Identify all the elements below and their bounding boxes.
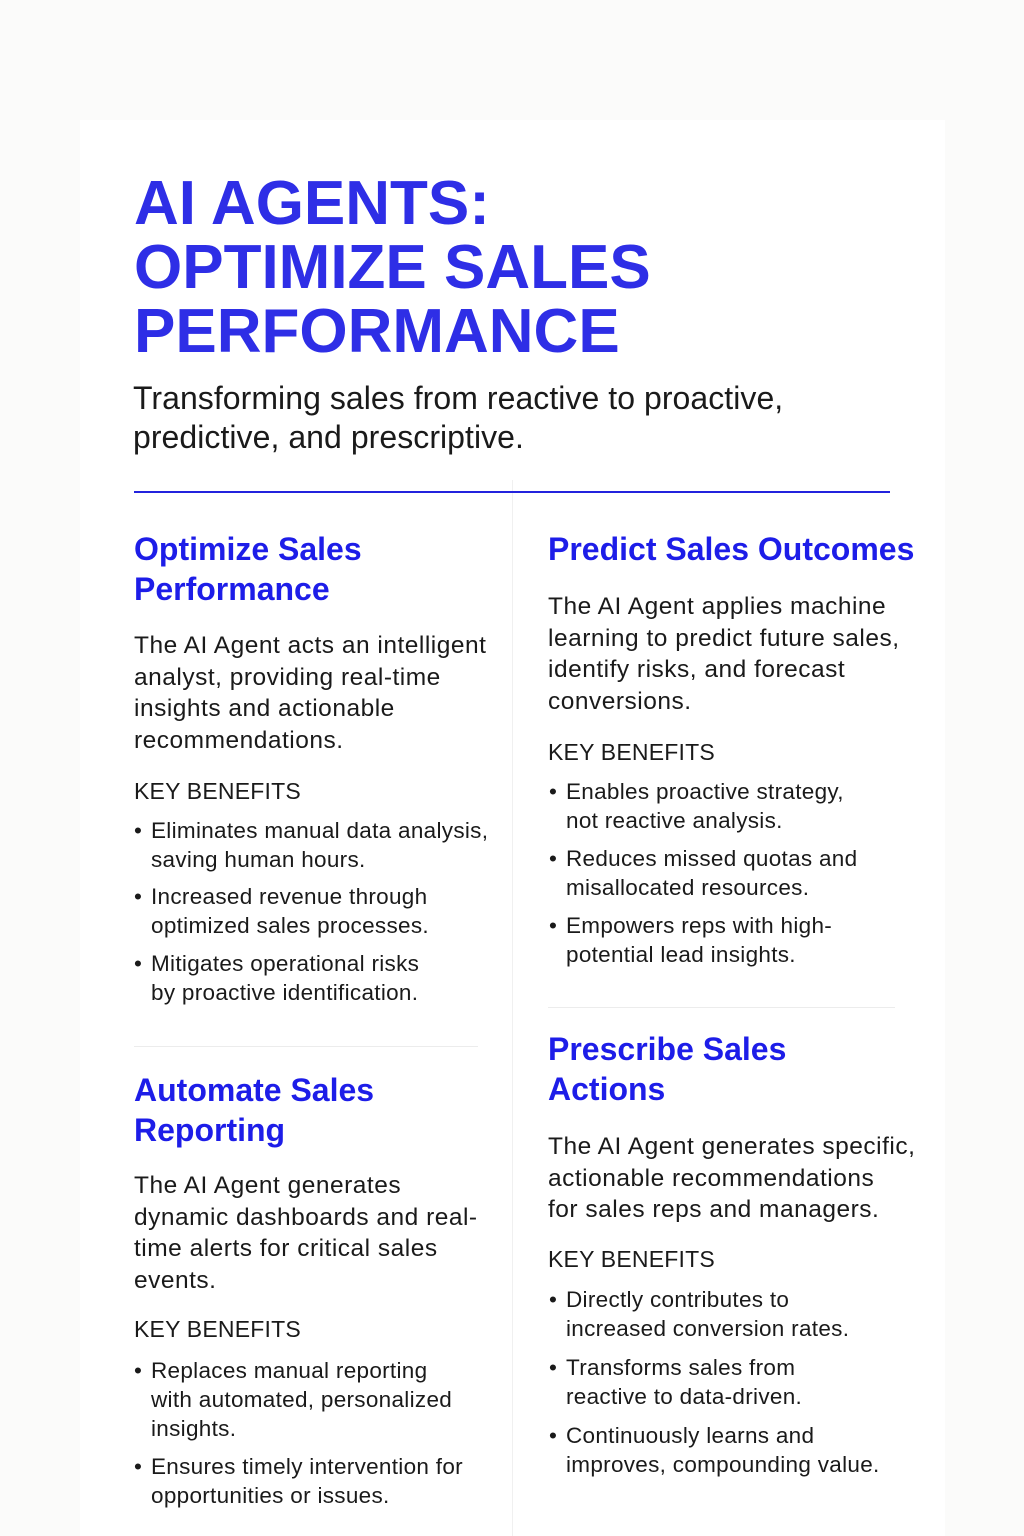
benefits list: with automated, personalized (151, 1387, 452, 1412)
panel: automate (134, 1072, 478, 1508)
panel: predict: misallocated resources. (566, 875, 809, 900)
panel: prescribe: improves, compounding value. (566, 1452, 880, 1477)
panel: automate: opportunities or issues. (151, 1483, 390, 1508)
title: AI AGENTS: (134, 169, 490, 238)
benefits list (549, 1287, 849, 1341)
text: predict (548, 593, 900, 715)
benefits list: Replaces manual reporting (151, 1358, 427, 1383)
panel: optimize: • (134, 818, 142, 843)
text: prescribe: for sales reps and managers. (548, 1196, 879, 1223)
panel: predict (548, 531, 914, 967)
panel: prescribe (548, 1031, 915, 1477)
text: prescribe: The AI Agent generates specific, (548, 1133, 915, 1160)
benefits list: insights. (151, 1416, 236, 1441)
text: optimize: recommendations. (134, 727, 344, 754)
benefits list: saving human hours. (151, 847, 366, 872)
key benefits label: KEY BENEFITS (548, 1246, 715, 1272)
text: prescribe (548, 1133, 915, 1223)
heading: prescribe: Actions (548, 1071, 665, 1107)
subtitle: predictive, and prescriptive. (133, 419, 524, 455)
benefits list: Eliminates manual data analysis, (151, 818, 488, 843)
panel: predict: • (549, 846, 557, 871)
panel: prescribe: • (549, 1423, 557, 1448)
benefits list (549, 779, 844, 833)
benefits list: Enables proactive strategy, (566, 779, 844, 804)
panel: optimize: by proactive identification. (151, 980, 418, 1005)
heading: prescribe: Prescribe Sales (548, 1031, 786, 1067)
panel: optimize: • (134, 884, 142, 909)
panel: automate: • (134, 1358, 142, 1383)
heading: optimize: Optimize Sales (134, 531, 362, 567)
panel: predict: Empowers reps with high- (566, 913, 832, 938)
panel: optimize: Mitigates operational risks (151, 951, 419, 976)
text: automate: time alerts for critical sales (134, 1235, 438, 1262)
heading: predict: Predict Sales Outcomes (548, 531, 914, 567)
panel: predict: • (549, 779, 557, 804)
text: automate: The AI Agent generates (134, 1172, 401, 1199)
card background (80, 120, 945, 1536)
title (134, 169, 651, 366)
panel: prescribe: • (549, 1355, 557, 1380)
text: predict: conversions. (548, 688, 692, 715)
panel: optimize: Increased revenue through (151, 884, 427, 909)
panel: predict: • (549, 913, 557, 938)
panel: optimize (134, 531, 488, 1005)
text: optimize: analyst, providing real-time (134, 664, 441, 691)
key benefits label: KEY BENEFITS (134, 778, 301, 804)
benefits list: increased conversion rates. (566, 1316, 849, 1341)
text: optimize (134, 632, 486, 754)
benefits list (134, 818, 488, 872)
text: automate (134, 1172, 478, 1294)
panel: prescribe: Continuously learns and (566, 1423, 814, 1448)
text: optimize: insights and actionable (134, 695, 395, 722)
subtitle (133, 380, 783, 455)
panel: automate: • (134, 1454, 142, 1479)
heading: automate: Automate Sales (134, 1072, 374, 1108)
title: OPTIMIZE SALES (134, 233, 651, 302)
subtitle: Transforming sales from reactive to proactive, (133, 380, 783, 416)
key benefits label: KEY BENEFITS (134, 1316, 301, 1342)
panel: optimize: • (134, 951, 142, 976)
heading: optimize: Performance (134, 571, 330, 607)
heading: optimize (134, 531, 362, 607)
key benefits label: KEY BENEFITS (548, 739, 715, 765)
text: optimize: The AI Agent acts an intelligent (134, 632, 486, 659)
benefits list: not reactive analysis. (566, 808, 783, 833)
panel: prescribe: • (549, 1287, 557, 1312)
panel: prescribe: Transforms sales from (566, 1355, 795, 1380)
panel: optimize: optimized sales processes. (151, 913, 429, 938)
benefits list: Directly contributes to (566, 1287, 789, 1312)
heading: automate: Reporting (134, 1112, 285, 1148)
heading: prescribe (548, 1031, 786, 1107)
panel: predict: potential lead insights. (566, 942, 796, 967)
title: PERFORMANCE (134, 297, 620, 366)
text: automate: events. (134, 1267, 216, 1294)
panel: automate: Ensures timely intervention for (151, 1454, 463, 1479)
text: predict: The AI Agent applies machine (548, 593, 886, 620)
benefits list (134, 1358, 452, 1441)
panel: predict: Reduces missed quotas and (566, 846, 857, 871)
text: predict: identify risks, and forecast (548, 656, 845, 683)
panel: prescribe: reactive to data-driven. (566, 1384, 802, 1409)
text: automate: dynamic dashboards and real- (134, 1204, 478, 1231)
text: predict: learning to predict future sales, (548, 625, 900, 652)
heading: automate (134, 1072, 374, 1148)
text: prescribe: actionable recommendations (548, 1165, 874, 1192)
